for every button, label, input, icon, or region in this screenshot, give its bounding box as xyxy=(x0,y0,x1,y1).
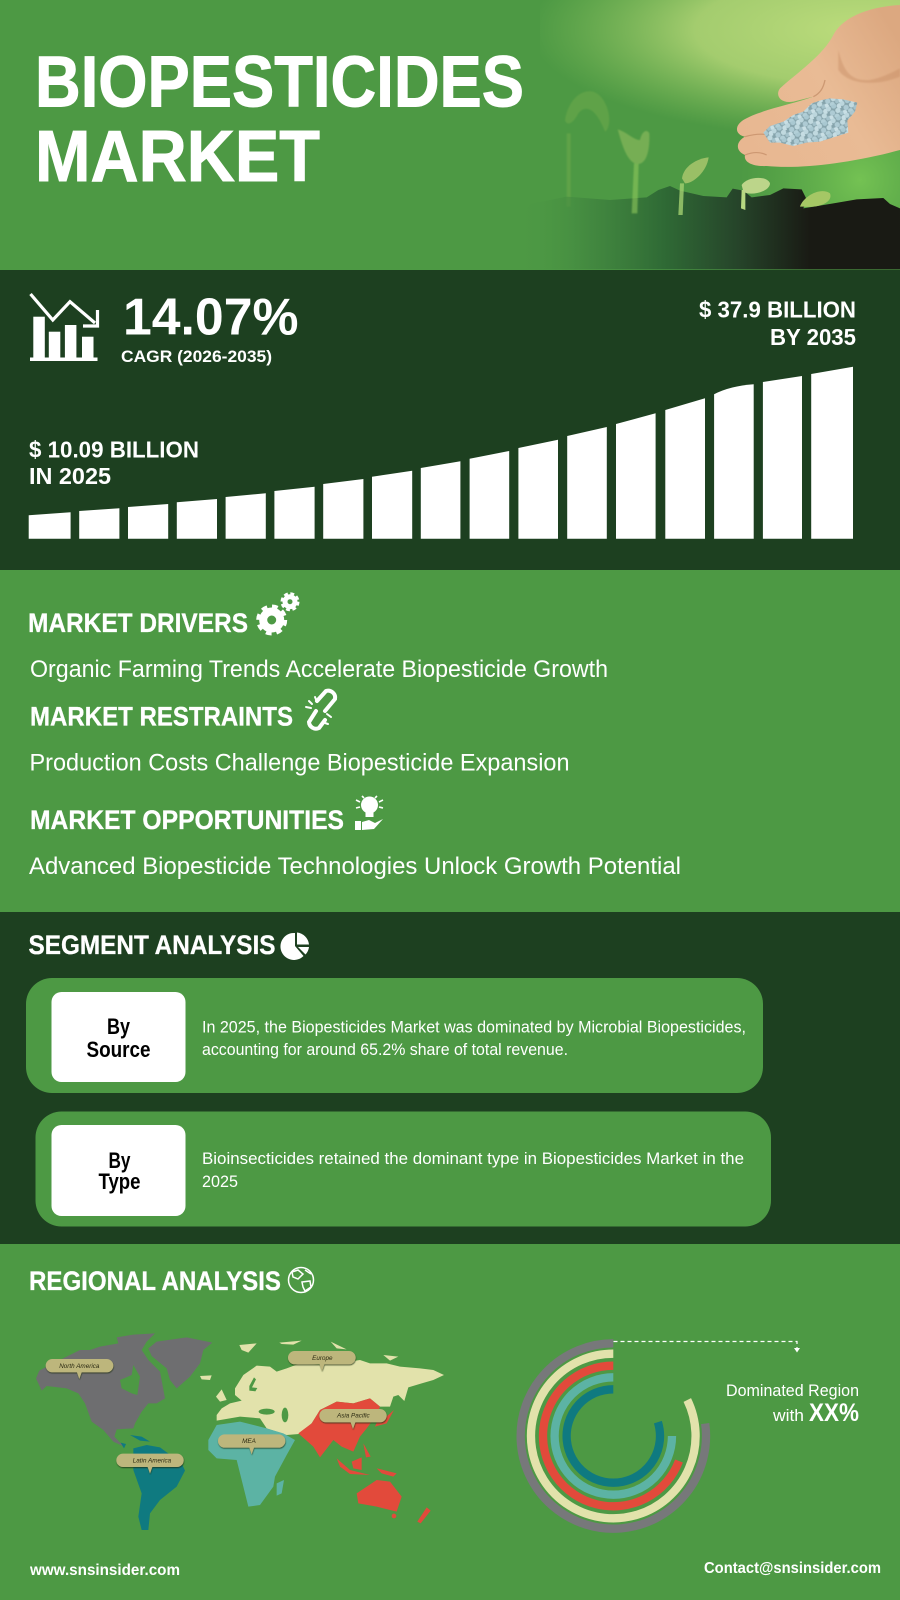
2035 forecast value: BY 2035 xyxy=(770,324,856,350)
panel: segment analysis xyxy=(0,912,900,1244)
CAGR label: CAGR (2026-2035) xyxy=(121,347,272,366)
icon: broken chain xyxy=(306,691,335,729)
region: Asia Pacific xyxy=(298,1398,431,1523)
callout: dominated region xyxy=(726,1381,859,1427)
2025 base value: IN 2025 xyxy=(29,463,111,489)
label box: by type: By xyxy=(108,1148,131,1173)
CAGR value: 14.07% xyxy=(123,288,298,346)
radial bar chart: regional share xyxy=(521,1343,706,1529)
description: by source: accounting for around 65.2% share of total revenue. xyxy=(202,1041,568,1059)
label box: by source: Source xyxy=(86,1037,150,1062)
label box: by type: Type xyxy=(98,1169,140,1194)
driver statement: Organic Farming Trends Accelerate Biopesticide Growth xyxy=(30,656,608,683)
label box: by type xyxy=(52,1125,186,1216)
heading: market restraints: MARKET RESTRAINTS xyxy=(30,702,293,732)
label box: by source xyxy=(52,992,186,1082)
callout: Latin America xyxy=(116,1454,184,1474)
region: Europe and Russia xyxy=(200,1341,444,1435)
2025 base value: $ 10.09 BILLION xyxy=(29,436,199,462)
region: Middle East and Africa xyxy=(208,1422,295,1507)
description: by source xyxy=(202,1018,746,1059)
2035 forecast value: $ 37.9 BILLION xyxy=(699,296,856,322)
title: BIOPESTICIDES xyxy=(35,42,524,122)
callout: North America xyxy=(46,1359,113,1379)
icon: gears xyxy=(259,594,298,633)
callout: Europe xyxy=(288,1351,356,1371)
card: by source xyxy=(26,978,763,1093)
dashed leader arrow xyxy=(614,1342,800,1352)
card: by type xyxy=(36,1112,771,1226)
hand xyxy=(737,5,900,167)
description: by type: Bioinsecticides retained the dominant type in Biopesticides Market in the xyxy=(202,1150,744,1168)
header photo: hand sowing seeds over soil xyxy=(470,0,900,269)
icon: pie chart xyxy=(280,932,309,960)
callout: Asia Pacific: Asia Pacific xyxy=(336,1413,371,1420)
callout: Asia Pacific xyxy=(319,1409,387,1429)
callout: dominated region: Dominated Region xyxy=(726,1381,859,1400)
footer: website: www.snsinsider.com xyxy=(29,1562,180,1579)
Hudson Bay xyxy=(120,1365,140,1395)
region: North America xyxy=(36,1333,212,1447)
callout: North America: North America xyxy=(59,1363,100,1370)
footer: contact email: Contact@snsinsider.com xyxy=(704,1560,881,1577)
soil mound xyxy=(470,186,900,269)
inland seas xyxy=(249,1377,288,1422)
description: by type: 2025 xyxy=(202,1173,238,1191)
heading: market drivers: MARKET DRIVERS xyxy=(28,608,248,638)
callout: MEA xyxy=(218,1434,285,1454)
panel: market dynamics xyxy=(28,594,681,880)
icon: light bulb in hand xyxy=(355,796,383,830)
restraint statement: Production Costs Challenge Biopesticide Expansion xyxy=(30,750,570,776)
seeds xyxy=(763,98,857,146)
callout: dominated region: XX% xyxy=(809,1399,859,1427)
panel: market size xyxy=(0,270,900,570)
callout: dominated region: with xyxy=(772,1406,804,1425)
heading: segment analysis: SEGMENT ANALYSIS xyxy=(28,930,276,960)
opportunity statement: Advanced Biopesticide Technologies Unlock Growth Potential xyxy=(29,853,681,880)
description: by source: In 2025, the Biopesticides Market was dominated by Microbial Biopesticides, xyxy=(202,1018,746,1036)
heading: regional analysis: REGIONAL ANALYSIS xyxy=(29,1266,281,1296)
title xyxy=(35,42,524,197)
label box: by source: By xyxy=(107,1014,131,1039)
2035 forecast value xyxy=(699,296,856,350)
callout: Latin America: Latin America xyxy=(133,1458,172,1465)
icon: growth chart xyxy=(30,294,98,361)
title: MARKET xyxy=(35,117,320,197)
callout: Europe: Europe xyxy=(312,1355,333,1362)
world map xyxy=(36,1333,444,1530)
2025 base value xyxy=(29,436,199,489)
description: by type xyxy=(202,1150,744,1191)
icon: globe xyxy=(288,1268,314,1292)
callout: MEA: MEA xyxy=(242,1438,256,1445)
bar chart: market growth 2025 to 2035 xyxy=(29,367,853,539)
region: Latin America xyxy=(121,1435,185,1530)
heading: market opportunities: MARKET OPPORTUNITIES xyxy=(30,805,344,835)
